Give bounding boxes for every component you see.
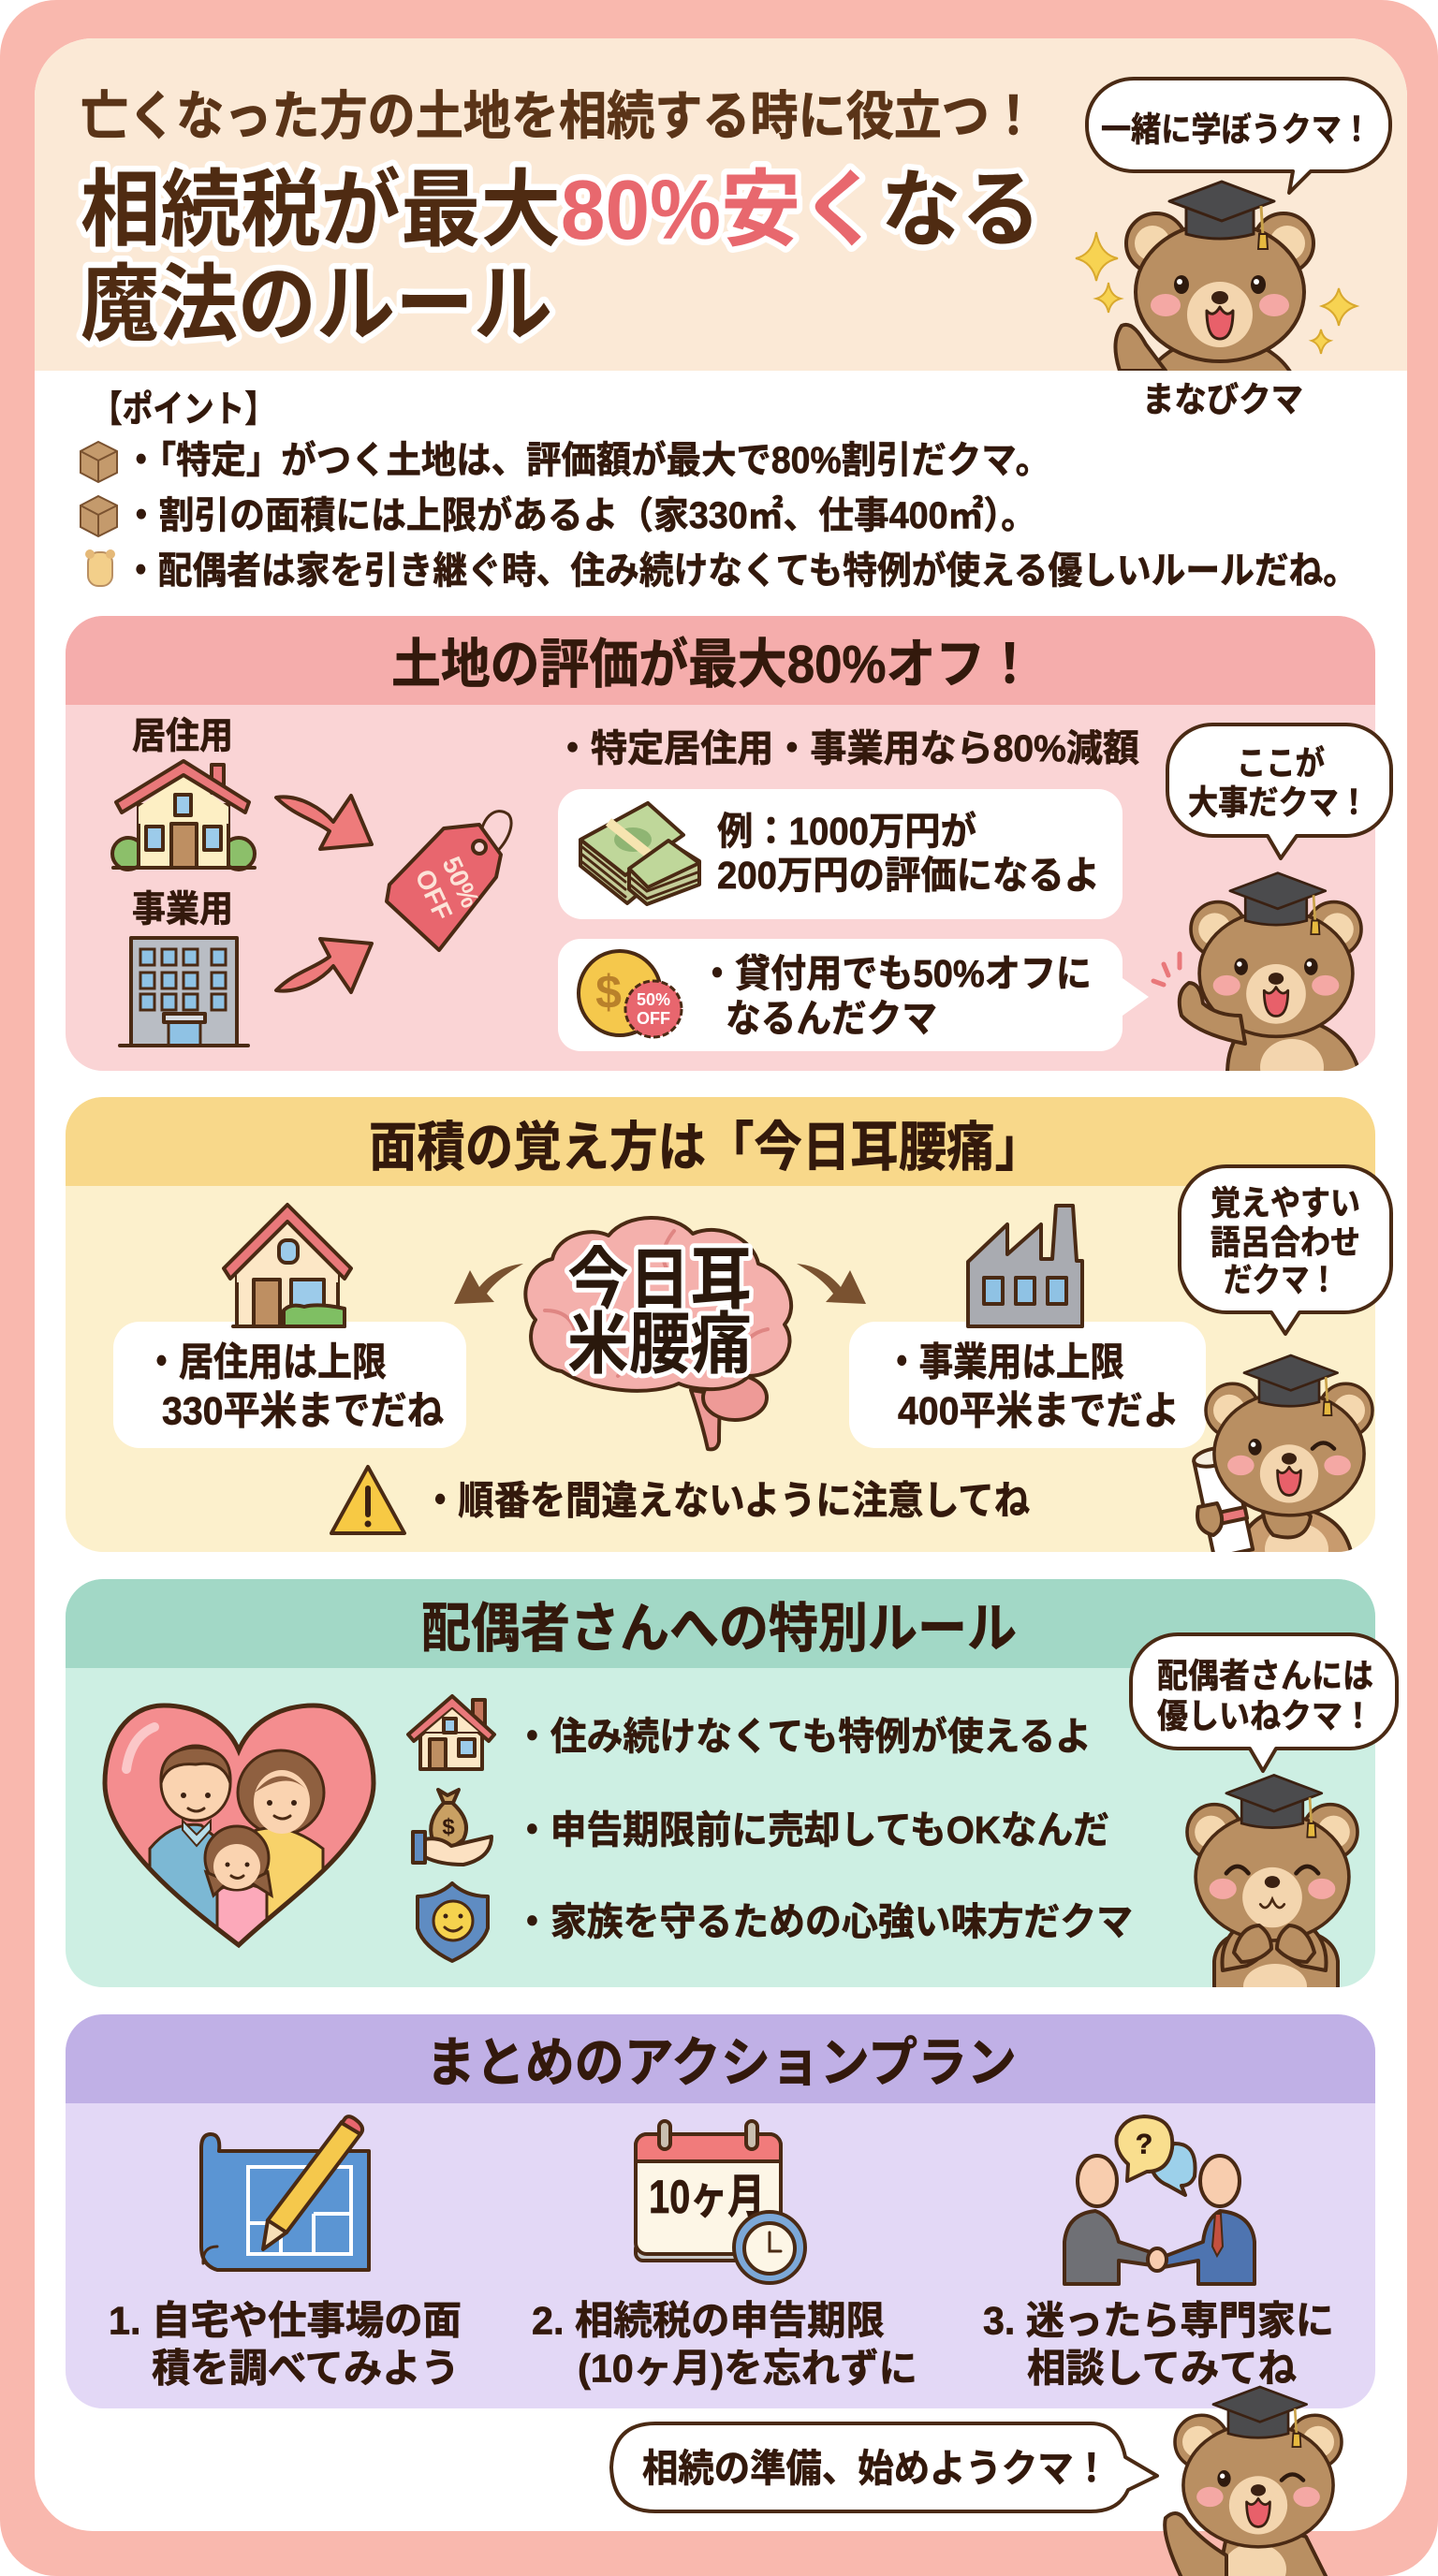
speech bubble: get started: 相続の準備、始めようクマ！	[642, 2447, 1109, 2490]
speech bubble: mnemonic: 覚えやすい	[1211, 1183, 1360, 1222]
icon: brain with mnemonic: 米腰痛	[567, 1308, 752, 1383]
icon: box 1	[81, 442, 117, 482]
speech bubble: learn together	[1087, 79, 1390, 193]
loan card: なるんだクマ	[726, 997, 937, 1040]
panel: area mnemonic	[66, 1097, 1391, 1575]
speech bubble: mnemonic	[1180, 1166, 1391, 1334]
bear mascot: hands together	[1187, 1775, 1357, 2009]
arrow: to tag upper	[276, 796, 372, 849]
step 1	[109, 2299, 462, 2391]
speech bubble: mnemonic: 語呂合わせ	[1211, 1222, 1360, 1262]
panel: action plan	[66, 2014, 1375, 2408]
icon: money stack	[580, 803, 699, 904]
warning text: ・順番を間違えないように注意してね	[422, 1479, 1030, 1522]
speech bubble: spouse: 配偶者さんには	[1157, 1657, 1373, 1694]
speech bubble: mnemonic: だクマ！	[1224, 1260, 1338, 1299]
icon: brain with mnemonic	[525, 1218, 791, 1449]
step 2: (10ヶ月)を忘れずに	[578, 2346, 917, 2391]
card: business limit: ・事業用は上限	[885, 1340, 1124, 1383]
points list	[81, 389, 1357, 592]
speech bubble: important: ここが	[1237, 743, 1325, 783]
panel: spouse rule	[66, 1579, 1397, 2009]
step 2: 2. 相続税の申告期限	[532, 2299, 885, 2342]
icon: bear badge	[85, 549, 115, 586]
header panel	[35, 38, 1407, 371]
icon: house	[408, 1696, 494, 1769]
icon: warning	[331, 1467, 404, 1533]
speech bubble: spouse: 優しいねクマ！	[1157, 1696, 1373, 1735]
text: rule 1: ・住み続けなくても特例が使えるよ	[514, 1715, 1092, 1758]
icon: factory	[968, 1206, 1082, 1326]
text: rule 2: ・申告期限前に売却してもOKなんだ	[514, 1808, 1109, 1852]
loan card	[558, 939, 1149, 1051]
text: 80% reduction: ・特定居住用・事業用なら80%減額	[554, 728, 1139, 769]
speech bubble: learn together: 一緒に学ぼうクマ！	[1101, 110, 1372, 148]
card: residential limit: 330平米までだね	[162, 1389, 444, 1432]
bear mascot: waving	[1165, 2387, 1342, 2576]
subtitle: 亡くなった方の土地を相続する時に役立つ！	[81, 86, 1037, 146]
step 3: 3. 迷ったら専門家に	[983, 2299, 1334, 2342]
icon: money bag in hand	[413, 1790, 492, 1865]
icon: box 2	[81, 496, 117, 536]
calendar text: 10ヶ月	[649, 2171, 765, 2223]
icon: discount tag: 50%	[436, 852, 485, 912]
panel: land valuation	[66, 616, 1391, 1095]
icon: shield	[418, 1883, 488, 1961]
heading: まとめのアクションプラン	[426, 2033, 1017, 2093]
mnemonic text: 今日耳	[567, 1243, 752, 1318]
speech bubble: spouse	[1131, 1634, 1397, 1771]
bear mascot: pointing	[1153, 873, 1361, 1095]
icon: family in heart	[105, 1705, 374, 1947]
step 1: 積を調べてみよう	[152, 2346, 460, 2391]
loan text: ・貸付用でも50%オフに	[699, 952, 1092, 995]
heading: 土地の評価が最大80%オフ！	[391, 635, 1034, 695]
step 1: 1. 自宅や仕事場の面	[109, 2299, 462, 2342]
icon: office building	[120, 938, 248, 1046]
heading: 配偶者さんへの特別ルール	[421, 1599, 1017, 1659]
card: business limit	[849, 1322, 1206, 1448]
bear mascot: wink with scroll	[1191, 1355, 1372, 1575]
card: business limit: 400平米までだよ	[898, 1389, 1180, 1432]
point 3: ・配偶者は家を引き継ぐ時、住み続けなくても特例が使える優しいルールだね。	[124, 550, 1357, 592]
mascot name: まなびクマ	[1142, 380, 1303, 419]
card: residential limit: ・居住用は上限	[144, 1340, 387, 1383]
example card: 200万円の評価になるよ	[717, 854, 1100, 897]
icon: discount tag	[387, 812, 511, 950]
point 2: ・割引の面積には上限があるよ（家330㎡、仕事400㎡）。	[124, 495, 1036, 536]
text: rule 3: ・家族を守るための心強い味方だクマ	[514, 1900, 1133, 1943]
example card	[558, 789, 1123, 919]
step 2	[532, 2299, 917, 2391]
icon: consultation handshake	[1064, 2116, 1255, 2284]
icon: coin with badge: $	[595, 966, 622, 1018]
icon: house	[112, 761, 255, 870]
icon: coin with badge	[579, 951, 682, 1037]
icon: money bag in hand: $	[442, 1814, 455, 1840]
icon: consultation handshake: ?	[1136, 2129, 1152, 2160]
bear mascot: header	[1075, 180, 1359, 371]
arrow: to tag lower	[276, 939, 372, 992]
step 3: 相談してみてね	[1027, 2346, 1297, 2391]
card: residential limit	[113, 1322, 466, 1448]
speech bubble: important	[1167, 724, 1391, 858]
label: residential: 居住用	[132, 717, 233, 756]
main title line 1: 相続税が最大80%安くなる	[81, 164, 1041, 257]
step 3	[983, 2299, 1334, 2391]
point 1: ・「特定」がつく土地は、評価額が最大で80%割引だクマ。	[124, 440, 1050, 481]
main title line 2: 魔法のルール	[81, 258, 552, 352]
speech bubble: important: 大事だクマ！	[1188, 783, 1369, 822]
icon: discount tag: OFF	[409, 865, 458, 925]
heading: 面積の覚え方は「今日耳腰痛」	[369, 1118, 1043, 1178]
icon: coin with badge: 50%	[637, 990, 670, 1009]
example text: 例：1000万円が	[717, 810, 976, 853]
speech bubble: get started	[611, 2423, 1157, 2511]
icon: house	[224, 1205, 351, 1326]
icon: calendar with clock	[636, 2121, 805, 2283]
points heading: 【ポイント】	[92, 389, 275, 431]
icon: coin with badge: OFF	[637, 1009, 670, 1028]
sparkles	[1076, 232, 1357, 354]
arrow: left	[454, 1264, 523, 1304]
arrow: right	[797, 1264, 866, 1304]
label: business: 事業用	[132, 889, 233, 930]
icon: blueprint and pencil	[201, 2116, 369, 2270]
